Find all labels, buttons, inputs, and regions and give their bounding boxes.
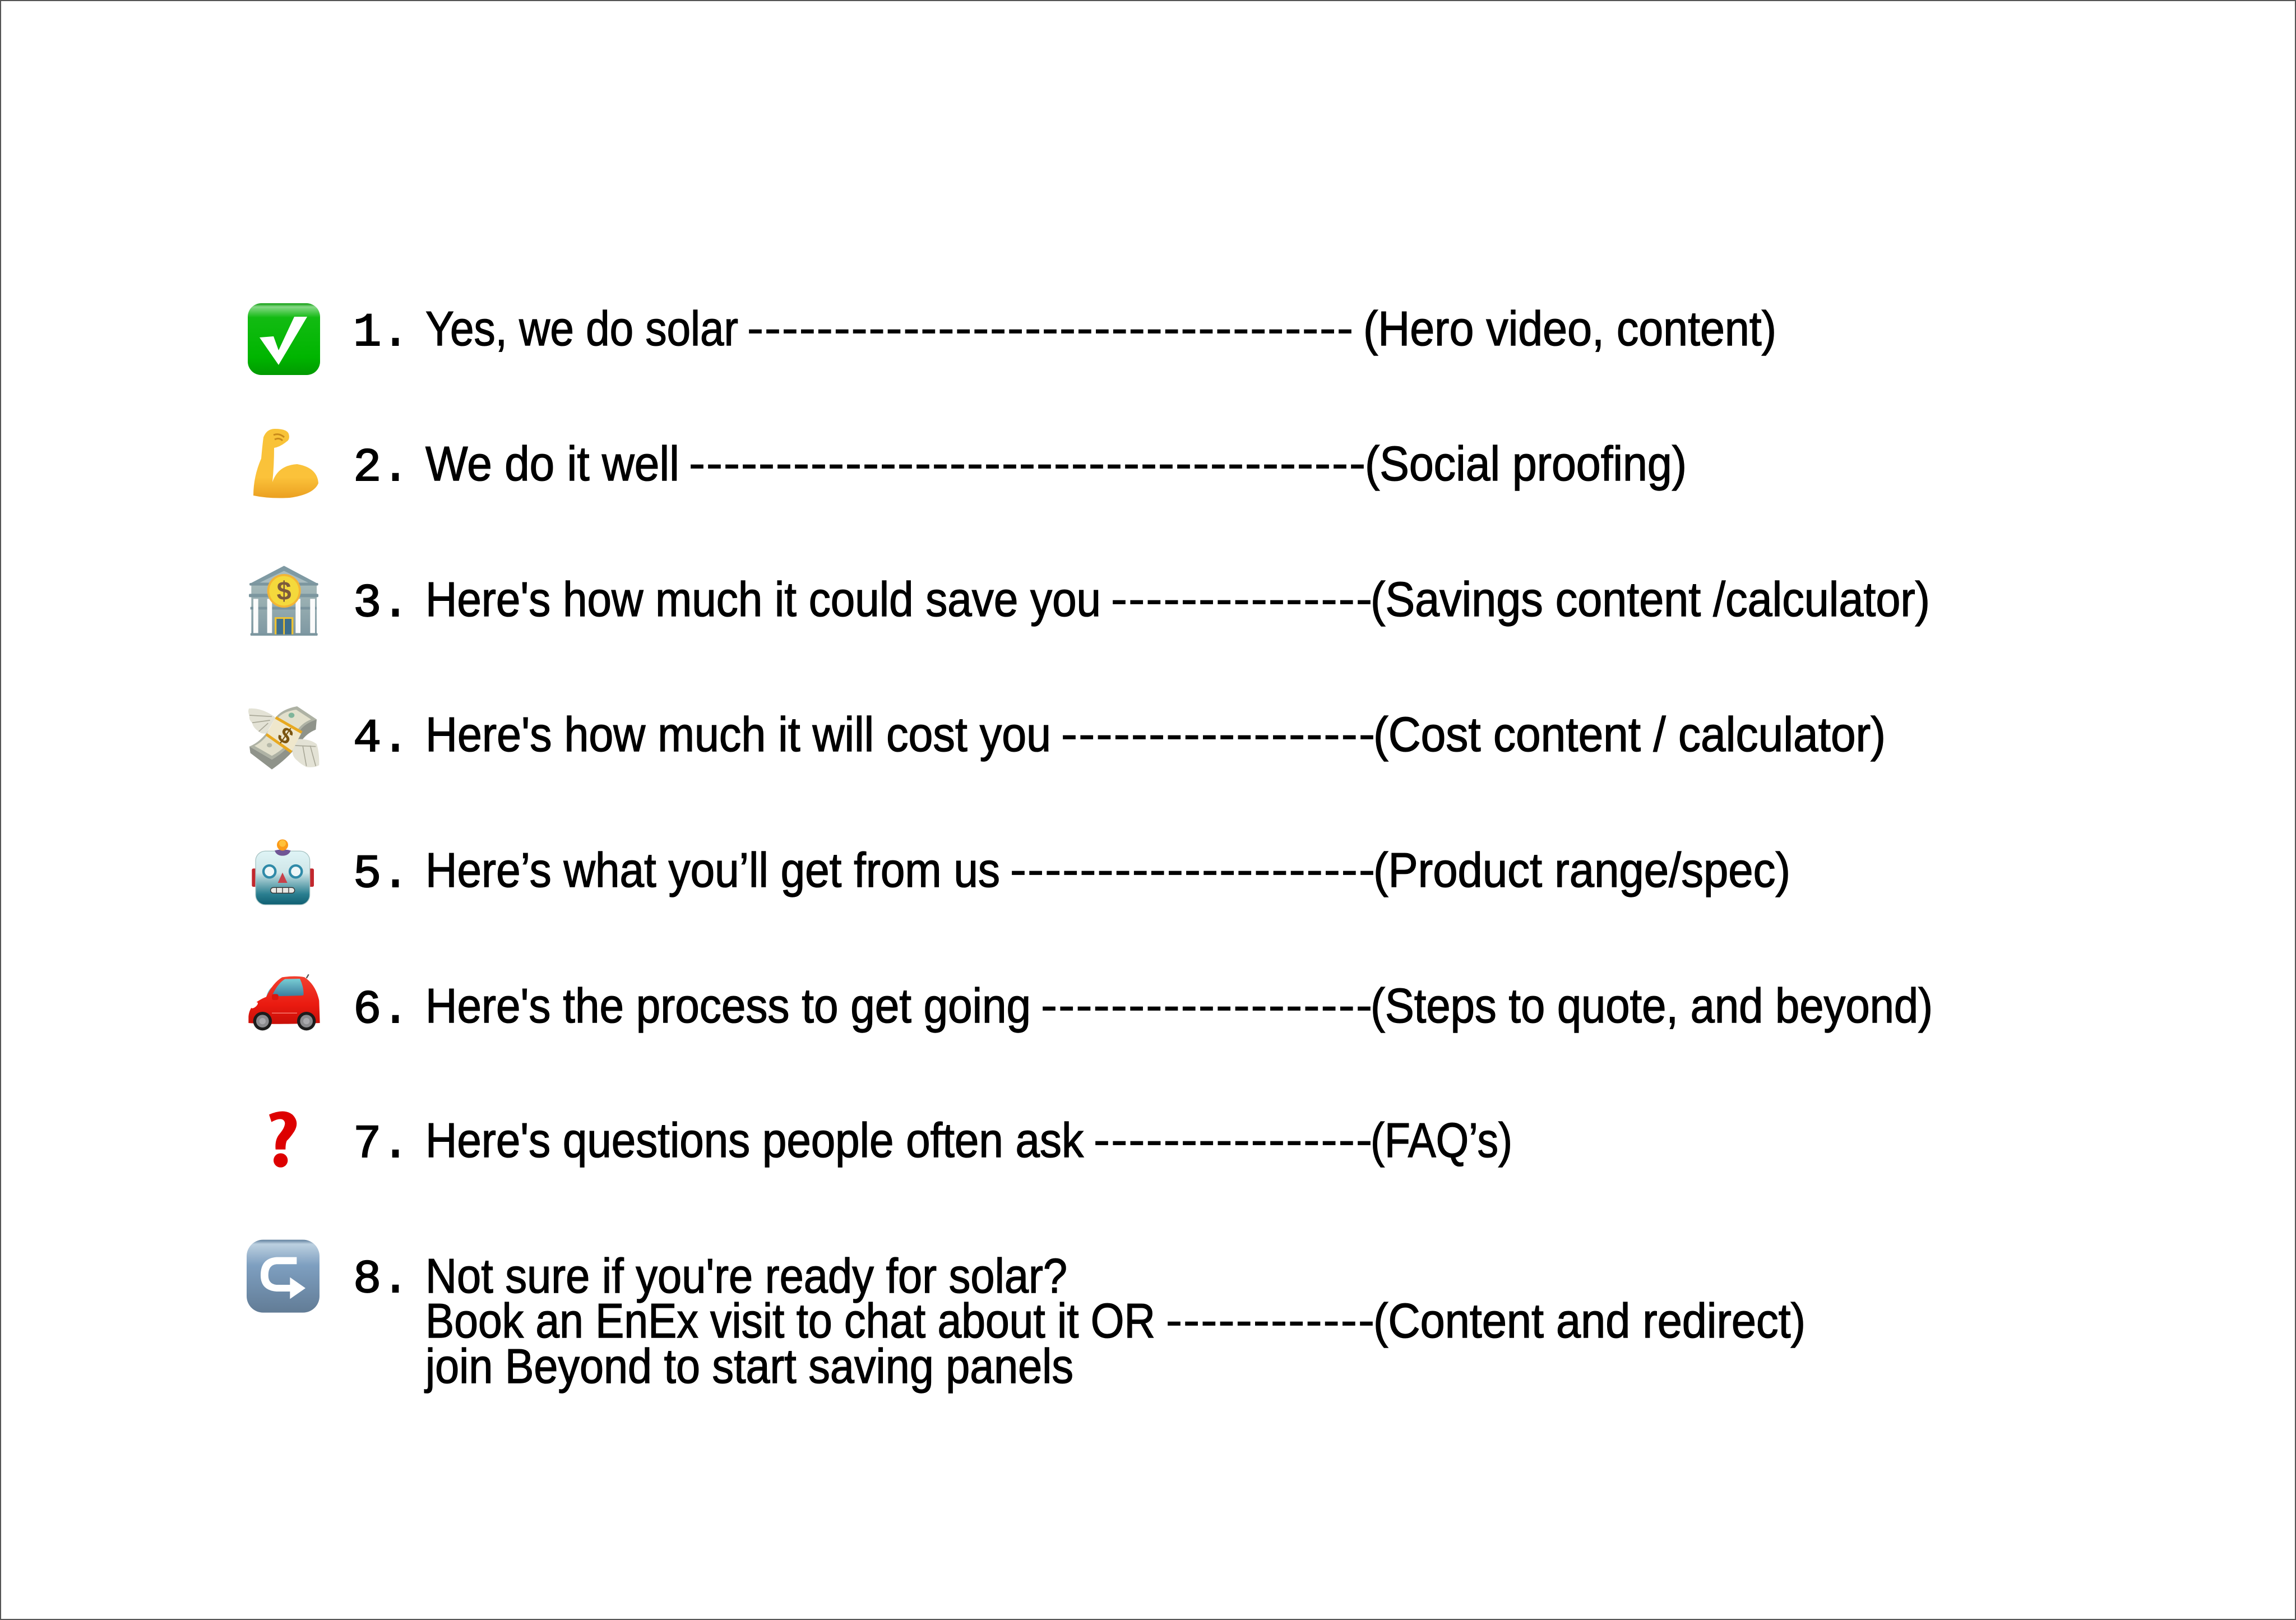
row 5: [252, 839, 1790, 905]
row 4: [248, 704, 1886, 770]
statement 4: Here's how much it will cost you: [425, 707, 1051, 762]
icon: bank with dollar coin: $: [277, 576, 291, 605]
statement 8 line 1: Not sure if you're ready for solar?: [425, 1249, 1067, 1303]
section label 2: (Social proofing): [1365, 437, 1687, 491]
icon: money with wings: [248, 706, 319, 770]
number 7: 7.: [353, 1118, 410, 1172]
number 8: 8.: [353, 1253, 410, 1307]
row 1: [248, 298, 1776, 375]
row 7: [269, 1110, 1512, 1172]
section label 3: (Savings content /calculator): [1371, 572, 1930, 627]
dashed connector 6: -------------------: [1040, 975, 1373, 1034]
number 3: 3.: [353, 577, 410, 631]
number 5: 5.: [353, 848, 410, 901]
icon: flexed biceps: [253, 429, 318, 498]
statement 5: Here’s what you’ll get from us: [425, 843, 1000, 897]
number 6: 6.: [353, 984, 410, 1037]
statement 7: Here's questions people often ask: [425, 1113, 1084, 1168]
number 4: 4.: [353, 712, 410, 766]
statement 8 line 2: Book an EnEx visit to chat about it OR: [425, 1294, 1155, 1348]
section label 1: (Hero video, content): [1363, 302, 1776, 356]
dashed connector 4: ------------------: [1061, 704, 1376, 762]
dashed connector 2: ---------------------------------------: [688, 433, 1366, 492]
icon: red question mark: [269, 1111, 297, 1168]
statement 6: Here's the process to get going: [425, 979, 1031, 1033]
statement 3: Here's how much it could save you: [425, 572, 1101, 627]
row 2: [253, 429, 1687, 498]
row 6: [248, 974, 1933, 1037]
number 1: 1.: [353, 307, 410, 360]
icon: money with wings: $: [274, 721, 298, 749]
statement 8 line 3: join Beyond to start saving panels: [424, 1339, 1073, 1394]
statement 1: Yes, we do solar: [425, 302, 738, 356]
icon: bank with dollar coin: [249, 566, 318, 636]
dashed connector 8: ------------: [1165, 1290, 1375, 1349]
statement 2: We do it well: [425, 437, 679, 491]
icon: green check mark: [248, 303, 320, 375]
dashed connector 3: ---------------: [1110, 569, 1373, 627]
dashed connector 1: -----------------------------------: [747, 298, 1354, 357]
section label 7: (FAQ’s): [1371, 1113, 1512, 1168]
icon: red car: [248, 974, 320, 1030]
section label 6: (Steps to quote, and beyond): [1371, 979, 1933, 1033]
row 3: [249, 566, 1930, 636]
section label 4: (Cost content / calculator): [1373, 707, 1886, 762]
dashed connector 5: ---------------------: [1010, 840, 1376, 898]
section label 5: (Product range/spec): [1373, 843, 1790, 897]
section label 8: (Content and redirect): [1373, 1294, 1806, 1348]
dashed connector 7: ----------------: [1093, 1110, 1373, 1168]
icon: right arrow curving back: [247, 1240, 320, 1313]
number 2: 2.: [353, 442, 410, 495]
icon: robot face: [252, 839, 314, 905]
row 8: [247, 1240, 1806, 1394]
